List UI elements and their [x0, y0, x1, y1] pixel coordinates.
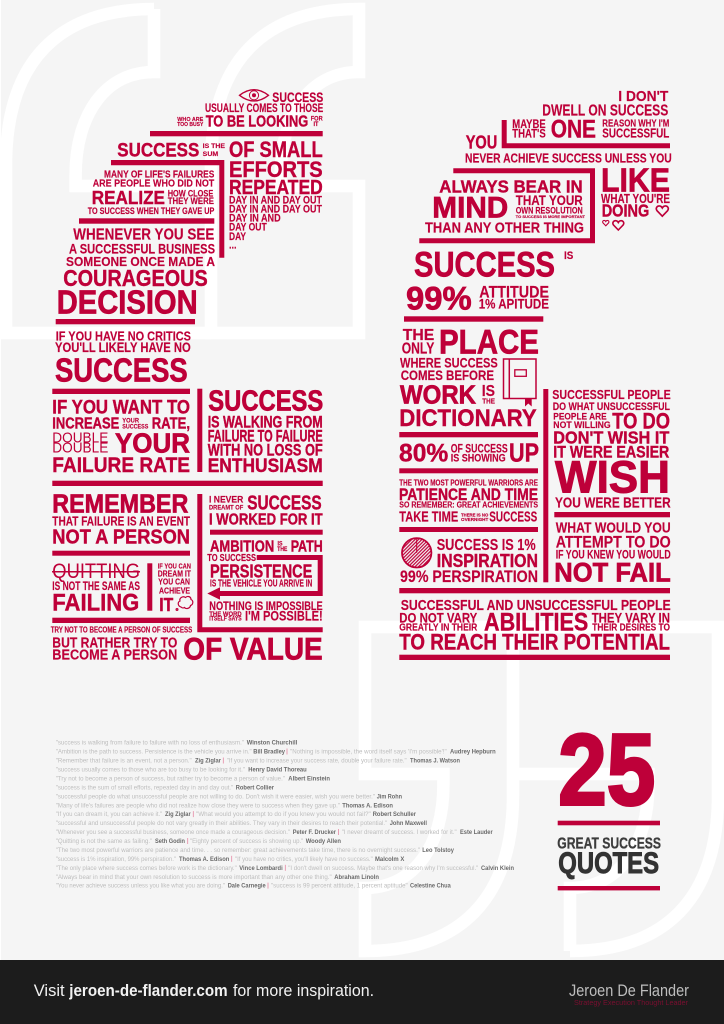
text block: list of quote sources: John Maxwell — [390, 820, 427, 827]
quote: successful people do what unsuccessful people are not willing to do: PEOPLE ARE — [553, 411, 607, 422]
quote: nothing is impossible: ITSELF SAYS — [209, 617, 242, 623]
text block: list of quote sources: Dale Carnegie — [228, 883, 266, 890]
quote: always bear in mind: THAN ANY OTHER THING — [425, 221, 584, 237]
quote: success is 1% inspiration: SUCCESS IS 1% — [437, 537, 536, 554]
text block: list of quote sources: Leo Tolstoy — [422, 847, 454, 854]
quote: success is the sum of small efforts: DAY — [229, 231, 246, 243]
text block: list of quote sources: "If you can dream it, you can achieve it." — [56, 811, 162, 818]
text block: list of quote sources: "success is walking from failure to failure with no loss of enthusiasm." — [56, 740, 244, 747]
quote: i don't dwell on success: THAT'S — [512, 129, 546, 141]
quote: what would you attempt to do: WHAT WOULD YOU — [556, 520, 671, 537]
quote: 80% of success is showing up: UP — [509, 440, 539, 468]
quote: successful people do what unsuccessful people are not willing to do: SUCCESSFUL PEOPLE — [552, 387, 671, 402]
text block: list of quote sources: "The two most powerful warriors are patience and time. . . so remember: great achievements take time, there is no overnight success." — [56, 847, 420, 854]
quote: i never dreamt of success: DREAMT OF — [209, 504, 243, 511]
quote: if you can dream it you can achieve it: IF YOU CAN — [158, 561, 191, 570]
background: giant closing quotation marks — [365, 627, 718, 951]
quote: success is the sum of small efforts: DAY IN AND DAY OUT — [229, 204, 322, 216]
quote: nothing is impossible: I'M POSSIBLE! — [245, 608, 323, 624]
icon: thought cloud — [176, 596, 193, 610]
quote: quitting is not the same as failing: QUITTING — [52, 560, 140, 583]
quote: ambition is the path to success: TO SUCCESS — [207, 553, 256, 564]
text block: list of quote sources: "Remember that failure is an event, not a person." — [56, 758, 192, 765]
text block: list of quote sources: Calvin Klein — [481, 865, 514, 872]
quote: remember that failure is an event — [52, 489, 190, 548]
quote: successful and unsuccessful people abilities: THEIR DESIRES TO — [592, 623, 670, 634]
quote: if you have no critics: YOU'LL LIKELY HAVE NO — [55, 340, 191, 355]
quote: successful and unsuccessful people abilities: GREATLY IN THEIR — [399, 623, 477, 634]
quote: try not to become a person of success: BECOME A PERSON — [52, 647, 177, 663]
quote: what would you attempt to do: IF YOU KNEW YOU WOULD — [556, 547, 671, 561]
quote: you never achieve success unless you like: WHAT YOU'RE — [601, 192, 670, 206]
quote: success usually comes to those too busy: FOR — [311, 116, 323, 122]
quote: success is the sum of small efforts: OF SMALL — [229, 137, 323, 162]
quote: always bear in mind: THAT YOUR — [516, 193, 583, 208]
quote: success is 1% inspiration: INSPIRATION — [437, 550, 538, 571]
text block: list of quote sources: "Quitting is not the same as failing." — [56, 838, 152, 845]
quote: i don't dwell on success: I DON'T — [618, 88, 668, 105]
text block: list of quote sources: "Always bear in mind that your own resolution to success is more important than any other one thing." — [56, 874, 332, 881]
quote: if you want to increase your success rate: IF YOU WANT TO — [52, 397, 190, 418]
quote: success usually comes to those too busy: TOO BUSY — [177, 122, 204, 128]
text block: list of quote sources: Woody Allen — [306, 838, 341, 845]
quote: successful people do what unsuccessful people are not willing to do — [552, 387, 671, 511]
quote: success is the sum of small efforts: EFFORTS — [229, 157, 323, 182]
quote: many of life's failures: ARE PEOPLE WHO DID NOT — [93, 179, 215, 190]
quote: i don't dwell on success: SUCCESSFUL — [602, 127, 670, 141]
quote: you never achieve success unless you like: NEVER ACHIEVE SUCCESS UNLESS YOU — [465, 152, 672, 166]
text block: list of quote sources: "The only place where success comes before work is the dictionary." — [56, 865, 237, 872]
quote: i don't dwell on success: MAYBE — [512, 119, 546, 131]
quote: success is the sum of small efforts: DAY OUT — [229, 222, 267, 234]
quote: quitting is not the same as failing: FAILING — [52, 590, 139, 617]
quote: success usually comes to those too busy: TO BE LOOKING — [206, 114, 308, 131]
quote: i never dreamt of success: I NEVER — [209, 494, 244, 504]
text block: list of quote sources: Seth Godin — [155, 838, 185, 845]
quote: i don't dwell on success: ONE — [551, 115, 596, 143]
quote: success usually comes to those too busy: SUCCESS — [272, 90, 323, 105]
quote: nothing is impossible: THE WORD — [209, 612, 242, 618]
text block: list of quote sources: Peter F. Drucker — [293, 829, 336, 836]
quote: success is 1% inspiration — [400, 537, 538, 586]
quote: success is walking from failure to failure: FAILURE TO FAILURE — [208, 427, 323, 445]
quote: always bear in mind: OWN RESOLUTION — [516, 205, 583, 216]
quote: successful and unsuccessful people abilities: DO NOT VARY — [399, 611, 477, 626]
quote: successful and unsuccessful people abilities: THEY VARY IN — [592, 611, 670, 626]
text block: list of quote sources: Jim Rohn — [377, 793, 402, 800]
quote: successful people do what unsuccessful people are not willing to do: NOT WILLING — [553, 420, 611, 431]
quote: if you want to increase your success rate — [52, 397, 190, 477]
quote: whenever you see a successful business — [57, 227, 216, 320]
icon: hearts — [603, 206, 668, 230]
quote: 80% of success is showing up — [399, 440, 539, 468]
quote: success is 99% attitude: 99% — [406, 279, 472, 316]
quote: try not to become a person of success: TRY NOT TO BECOME A PERSON OF SUCCESS — [51, 626, 193, 635]
quote: success is the sum of small efforts: ... — [229, 240, 237, 252]
text block: list of quote sources: Robert Schuller — [373, 811, 416, 818]
quote: successful people do what unsuccessful people are not willing to do: DO WHAT UNSUCCESSFUL — [553, 401, 670, 413]
quote: i never dreamt of success: SUCCESS — [247, 491, 322, 514]
quote: i don't dwell on success: REASON WHY I'M — [602, 119, 669, 130]
footer link text: for more inspiration. — [233, 981, 374, 1000]
quote: success is the sum of small efforts: DAY IN AND — [229, 212, 281, 224]
text block: list of quote sources: Winston Churchill — [247, 740, 297, 747]
quote: if you want to increase your success rate: FAILURE RATE — [52, 453, 190, 477]
quote: the only place where success comes before work: DICTIONARY — [399, 405, 537, 432]
quote: the only place where success comes before work: PLACE — [439, 323, 539, 361]
quote: nothing is impossible: NOTHING IS IMPOSSIBLE — [209, 599, 323, 613]
quote: 80% of success is showing up: OF SUCCESS — [451, 442, 508, 456]
quote: if you have no critics — [55, 329, 191, 389]
text block: list of quote sources: "I don't dwell on success. Maybe that's one reason why I'm successful." — [288, 865, 478, 872]
text block: list of quote sources: "success is 99 percent attitude, 1 percent aptitude" — [271, 883, 408, 890]
quote: successful people do what unsuccessful people are not willing to do: IT WERE EASIER — [553, 443, 669, 461]
text block: list of quote sources: Audrey Hepburn — [450, 749, 496, 756]
quote: ambition is the path to success: PERSISTENCE — [210, 561, 312, 582]
heading: quotes: QUOTES — [558, 847, 659, 880]
quote: the two most powerful warriors: TAKE TIME — [399, 510, 459, 526]
quote: try not to become a person of success: OF VALUE — [183, 630, 323, 666]
quote: the only place where success comes before work: WORK — [400, 379, 476, 409]
quote: you never achieve success unless you like — [465, 131, 672, 230]
quote: ambition is the path to success: IS THE VEHICLE YOU ARRIVE IN — [210, 579, 312, 590]
footer link text: jeroen-de-flander.com — [68, 981, 228, 1000]
text block: list of quote sources: Zig Ziglar — [165, 811, 191, 818]
quote: whenever you see a successful business: DECISION — [57, 283, 198, 320]
quote: many of life's failures — [88, 170, 215, 217]
quote: 80% of success is showing up: 80% — [399, 440, 448, 468]
quote: remember that failure is an event: REMEMBER — [52, 489, 188, 519]
quote: 80% of success is showing up: IS SHOWING — [451, 453, 506, 465]
quote: many of life's failures: TO SUCCESS WHEN THEY GAVE UP — [88, 206, 215, 217]
quote: quitting is not the same as failing: IS NOT THE SAME AS — [52, 579, 140, 593]
quote: successful people do what unsuccessful people are not willing to do: TO DO — [612, 408, 670, 433]
quote: if you want to increase your success rate: SUCCESS — [122, 423, 149, 430]
quote: many of life's failures: HOW CLOSE — [168, 189, 214, 200]
quote: whenever you see a successful business: COURAGEOUS — [63, 265, 208, 291]
quote: success is 99% attitude: ATTITUDE — [479, 283, 549, 301]
text block: list of quote sources: "Try not to become a person of success, but rather try to become a person of value." — [56, 776, 285, 782]
quote: if you want to increase your success rate: YOUR — [122, 418, 139, 425]
background: giant opening quotation marks — [6, 9, 359, 333]
quote: if you can dream it you can achieve it — [158, 561, 193, 615]
quote: successful and unsuccessful people abilities: ABILITIES — [484, 609, 588, 637]
text block: list of quote sources: Thomas J. Watson — [410, 758, 460, 765]
quote: the two most powerful warriors: SUCCESS — [489, 510, 538, 526]
quote: if you can dream it you can achieve it: IT — [159, 594, 174, 615]
quote: success is walking from failure to failure: ENTHUSIASM — [208, 455, 323, 477]
quote: ambition is the path to success: THE — [277, 547, 287, 553]
quote: success is the sum of small efforts: IS THE — [203, 143, 225, 150]
quote: remember that failure is an event: THAT FAILURE IS AN EVENT — [52, 514, 190, 529]
quote: try not to become a person of success: BUT RATHER TRY TO — [52, 635, 177, 651]
quote: success is 99% attitude — [406, 244, 573, 316]
quote: the two most powerful warriors: PATIENCE AND TIME — [399, 485, 538, 504]
quote: what would you attempt to do: NOT FAIL — [554, 557, 671, 588]
quote: success usually comes to those too busy: WHO ARE — [177, 117, 204, 123]
quote: success is the sum of small efforts — [117, 137, 323, 252]
footer band — [0, 960, 724, 1024]
quote: successful people do what unsuccessful people are not willing to do: DON'T WISH IT — [553, 427, 669, 447]
quote: i don't dwell on success: DWELL ON SUCCESS — [542, 103, 668, 120]
quote: always bear in mind: MIND — [432, 191, 508, 224]
text block: list of quote sources: Este Lauder — [460, 829, 493, 836]
text block: list of quote sources: "What would you attempt to do if you knew you would not fail?" — [196, 811, 371, 818]
quote: if you can dream it you can achieve it: ACHIEVE — [159, 585, 190, 595]
quote: many of life's failures: REALIZE — [92, 187, 165, 208]
quote: if you have no critics: SUCCESS — [55, 352, 188, 389]
title: 25 great success quotes — [557, 714, 661, 890]
number 25: 25 — [558, 714, 655, 826]
quote: the two most powerful warriors: OVERNIGHT — [461, 517, 488, 523]
quote: nothing is impossible — [209, 599, 323, 624]
quote: whenever you see a successful business: WHENEVER YOU SEE — [73, 227, 214, 244]
quote: the two most powerful warriors: THERE IS NO — [461, 513, 489, 519]
text block: list of quote sources: Henry David Thoreau — [248, 766, 307, 774]
quote: always bear in mind — [425, 176, 586, 237]
quote: many of life's failures: THEY WERE — [168, 196, 214, 207]
quote: the only place where success comes before work — [399, 323, 539, 432]
quote: successful people do what unsuccessful people are not willing to do: WISH — [555, 451, 670, 502]
quote: successful and unsuccessful people abilities: SUCCESSFUL AND UNSUCCESSFUL PEOPLE — [401, 598, 671, 614]
quote: the two most powerful warriors: THE TWO MOST POWERFUL WARRIORS ARE — [399, 479, 538, 488]
quote: success is walking from failure to failure: IS WALKING FROM — [208, 413, 323, 431]
text block: list of quote sources: "Ambition is the path to success. Persistence is the vehicle you arrive in." — [56, 749, 252, 756]
text block: list of quote sources: Bill Bradley — [253, 749, 285, 756]
quote: i never dreamt of success: I WORKED FOR IT — [209, 512, 323, 529]
text block: list of quote sources: "Whenever you see a successful business, someone once made a courageous decision." — [56, 829, 290, 836]
quote: success is 99% attitude: SUCCESS — [414, 244, 555, 284]
icon: dictionary book — [504, 359, 536, 406]
text block: list of quote sources: "successful and unsuccessful people do not vary greatly in their abilities. They vary in their desires to reach their potential." — [56, 820, 387, 827]
footer author name: Jeroen De Flander — [569, 981, 689, 1000]
text block: list of quote sources: Vince Lombardi — [239, 865, 283, 872]
text block: list of quote sources: Thomas A. Edison — [342, 802, 393, 809]
quote: what would you attempt to do — [554, 520, 671, 588]
quote: what would you attempt to do: ATTEMPT TO DO — [556, 533, 671, 552]
quote: success is the sum of small efforts: SUM — [203, 151, 219, 158]
quote: success is 99% attitude: 1% APITUDE — [479, 296, 549, 312]
quote: whenever you see a successful business: A SUCCESSFUL BUSINESS — [69, 241, 215, 256]
icon: hatched pie chart — [402, 538, 431, 568]
quote: i never dreamt of success — [209, 491, 323, 529]
quote: many of life's failures: MANY OF LIFE'S FAILURES — [104, 170, 214, 181]
text block: list of quote sources: "success usually comes to those who are too busy to be looking for it." — [56, 766, 245, 774]
text block: list of quote sources: "You never achieve success unless you like what you are doing." — [56, 883, 225, 890]
quote: always bear in mind: ALWAYS BEAR IN — [439, 176, 583, 196]
footer link text: Visit — [34, 981, 65, 1000]
quote: the only place where success comes before work: IS — [482, 383, 495, 400]
text block: list of quote sources: Thomas A. Edison — [179, 856, 229, 863]
text block: list of quote sources: Malcolm X — [375, 856, 405, 863]
quote: you never achieve success unless you like: DOING — [602, 201, 649, 221]
quote: if you have no critics: IF YOU HAVE NO CRITICS — [56, 329, 191, 344]
heading: great success: GREAT SUCCESS — [557, 835, 661, 852]
footer tagline: Strategy Execution Thought Leader — [574, 998, 689, 1007]
quote: if you can dream it you can achieve it: DREAM IT — [158, 570, 191, 579]
quote: the only place where success comes before work: COMES BEFORE — [401, 368, 494, 383]
text block: list of quote sources: "If you have no critics, you'll likely have no success." — [235, 856, 373, 863]
arrow: path to success — [207, 555, 323, 600]
quote: if you want to increase your success rate: YOUR — [115, 428, 190, 459]
quote: success is walking from failure to failure — [208, 386, 323, 477]
quote: successful and unsuccessful people abilities — [399, 598, 671, 654]
quote: ambition is the path to success: PATH — [291, 539, 323, 556]
text block: list of quote sources — [56, 740, 514, 890]
icon: eye — [240, 90, 268, 101]
quote: successful and unsuccessful people abilities: TO REACH THEIR POTENTIAL — [399, 629, 670, 654]
quote: the only place where success comes before work: ONLY — [402, 340, 435, 357]
quote: success usually comes to those too busy — [177, 90, 324, 131]
quote: you never achieve success unless you like: LIKE — [601, 163, 670, 200]
quote: if you want to increase your success rate: INCREASE — [52, 415, 120, 432]
quote: you never achieve success unless you like: YOU — [466, 131, 497, 152]
text block: list of quote sources: Albert Einstein — [288, 776, 330, 782]
footer link text — [34, 981, 374, 1000]
quote: try not to become a person of success — [51, 626, 323, 666]
quote: success is 1% inspiration: 99% PERSPIRATION — [400, 568, 538, 586]
quote: if you want to increase your success rate: DOUBLE — [52, 430, 108, 447]
quote: whenever you see a successful business: SOMEONE ONCE MADE A — [66, 254, 216, 269]
text block: list of quote sources: Zig Ziglar — [195, 758, 221, 765]
quote: success is the sum of small efforts: REPEATED — [229, 177, 323, 199]
text block: list of quote sources: Robert Collier — [236, 784, 274, 791]
quote: success is walking from failure to failure: WITH NO LOSS OF — [208, 441, 323, 459]
quote: the only place where success comes before work: THE — [403, 327, 435, 344]
text block: list of quote sources: "successful people do what unsuccessful people are not willing to do. Don't wish it were easier, wish you were better." — [56, 793, 375, 800]
quote: success usually comes to those too busy: USUALLY COMES TO THOSE — [205, 103, 324, 115]
quote: if you can dream it you can achieve it: YOU CAN — [158, 576, 190, 586]
quote: i don't dwell on success — [512, 88, 670, 143]
text block: list of quote sources: "I never dreamt of success. I worked for it." — [342, 829, 457, 836]
quote: successful people do what unsuccessful people are not willing to do: YOU WERE BETTER — [555, 495, 671, 511]
quote: the only place where success comes before work: THE — [482, 396, 495, 405]
quote: ambition is the path to success: IS — [278, 541, 283, 548]
quote: the only place where success comes before work: WHERE SUCCESS — [400, 356, 498, 371]
quote: success usually comes to those too busy: IT — [314, 122, 319, 128]
text block: list of quote sources: Celestine Chua — [410, 883, 451, 890]
quote: the two most powerful warriors — [399, 479, 538, 526]
quote: the two most powerful warriors: SO REMEMBER: GREAT ACHIEVEMENTS — [399, 500, 538, 510]
quote: if you want to increase your success rate: RATE, — [152, 415, 190, 432]
text block: list of quote sources: "If you want to increase your success rate, double your failure rate." — [227, 758, 407, 765]
quote: quitting is not the same as failing — [52, 560, 140, 617]
text block: list of quote sources: "success is the sum of small efforts, repeated day in and day out." — [56, 784, 233, 791]
quote: success is walking from failure to failure: SUCCESS — [208, 386, 323, 418]
quote: success is 99% attitude: IS — [564, 250, 573, 262]
text block: list of quote sources: Abraham Linoln — [334, 874, 379, 881]
text block: list of quote sources: "Many of life's failures are people who did not realize how close they were to success when they gave up." — [56, 802, 340, 809]
text block: list of quote sources: "success is 1% inspiration, 99% perspiration." — [56, 856, 176, 863]
quote: remember that failure is an event: NOT A PERSON — [52, 525, 190, 548]
text block: list of quote sources: "Nothing is impossible, the word itself says 'I'm possible'!" — [290, 749, 447, 756]
quote: always bear in mind: TO SUCCESS IS MORE IMPORTANT — [516, 214, 586, 219]
quote: ambition is the path to success: AMBITION — [210, 539, 274, 556]
quote: success is the sum of small efforts: SUCCESS — [117, 140, 199, 162]
quote: success is the sum of small efforts: DAY IN AND DAY OUT — [229, 194, 322, 206]
quote: if you want to increase your success rate: DOUBLE — [52, 439, 108, 456]
text block: list of quote sources: "Eighty percent of success is showing up." — [190, 838, 303, 845]
quote: ambition is the path to success — [207, 539, 323, 600]
